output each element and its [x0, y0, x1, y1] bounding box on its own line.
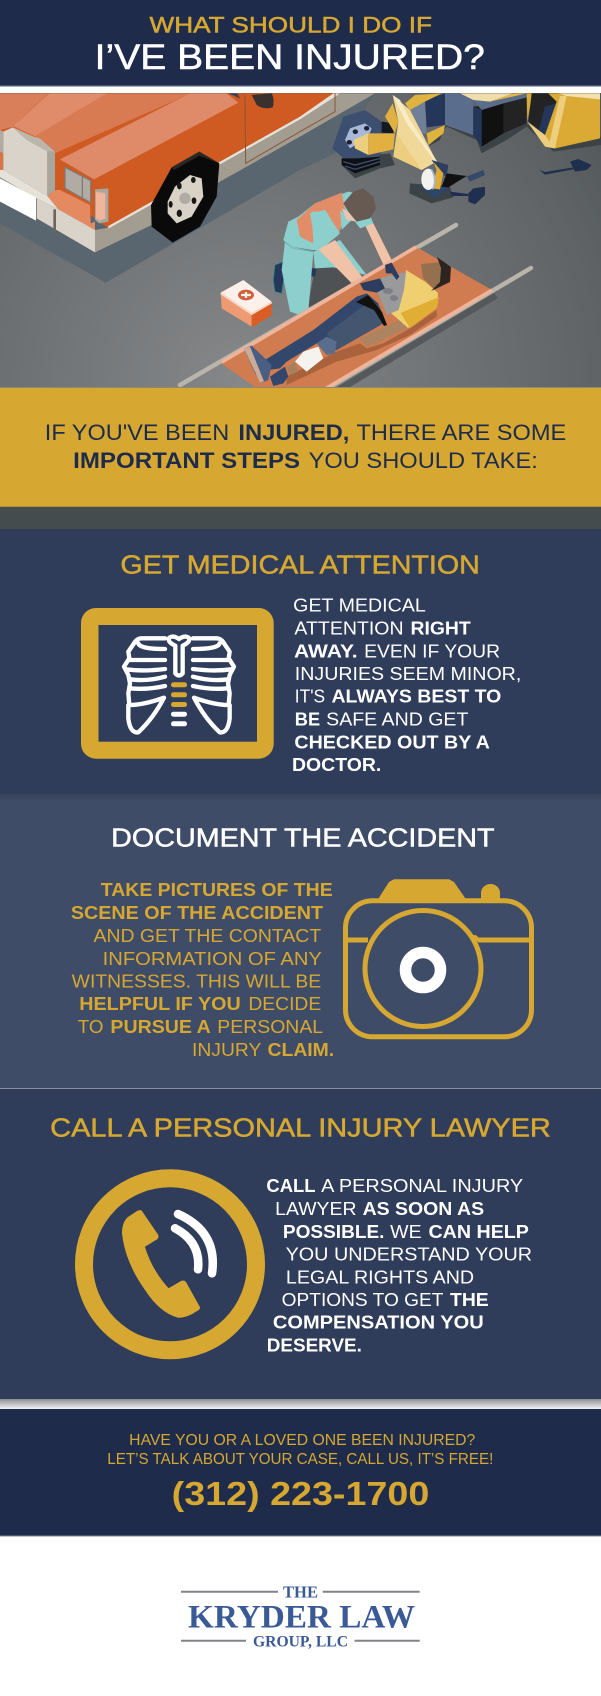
panel: call a personal injury lawyer	[0, 1089, 601, 1399]
heading: document the accident: DOCUMENT THE ACCIDENT	[111, 823, 495, 853]
panel: document the accident	[0, 793, 601, 1089]
motorcycle on its side	[332, 93, 601, 204]
text: document the accident	[71, 879, 334, 1060]
text: document the accident: CLAIM.	[268, 1039, 334, 1060]
text: medical attention	[292, 595, 521, 775]
text: medical attention: EVEN IF YOUR	[364, 640, 500, 661]
text: document the accident: TAKE PICTURES OF THE	[101, 879, 333, 900]
footer text line 2: LET’S TALK ABOUT YOUR CASE, CALL US, IT’S FREE!	[107, 1451, 493, 1468]
title line 1: WHAT SHOULD I DO IF	[150, 13, 432, 38]
text: call a lawyer: COMPENSATION YOU	[273, 1312, 484, 1333]
intro text	[45, 420, 566, 473]
text: call a lawyer: AS SOON AS	[363, 1198, 484, 1219]
text: call a lawyer: THE	[450, 1289, 489, 1310]
text: document the accident: INFORMATION OF ANY	[103, 948, 322, 969]
text: document the accident: WITNESSES. THIS WILL BE	[72, 970, 321, 991]
text: medical attention: BE	[295, 709, 320, 730]
text: medical attention: SAFE AND GET	[326, 709, 468, 730]
text: document the accident: HELPFUL IF YOU	[79, 993, 241, 1014]
text: call a lawyer: OPTIONS TO GET	[282, 1289, 443, 1310]
text: document the accident: DECIDE	[248, 993, 321, 1014]
heading: get medical attention: GET MEDICAL ATTENTION	[120, 552, 480, 580]
text: medical attention: CHECKED OUT BY A	[294, 731, 490, 752]
first aid kit	[221, 280, 272, 327]
title line 2: I’VE BEEN INJURED?	[95, 38, 485, 77]
text: call a lawyer: LAWYER	[275, 1198, 356, 1219]
logo group: GROUP, LLC	[253, 1634, 348, 1651]
text: document the accident: TO	[78, 1016, 104, 1037]
text: call a lawyer: WE	[390, 1221, 422, 1242]
phone number: (312) 223-1700	[172, 1475, 429, 1512]
medic kneeling	[273, 188, 393, 315]
text: medical attention: ALWAYS BEST TO	[332, 686, 501, 707]
text: medical attention: IT'S	[295, 686, 325, 707]
logo name: KRYDER LAW	[188, 1599, 415, 1635]
intro text: YOU SHOULD TAKE:	[309, 448, 538, 473]
icon: camera	[346, 879, 532, 1037]
text: medical attention: RIGHT	[410, 618, 471, 639]
text: call a lawyer: CALL	[266, 1175, 316, 1196]
text: document the accident: INJURY	[192, 1039, 261, 1060]
dark gap strip	[0, 507, 601, 529]
text: document the accident: AND GET THE CONTACT	[94, 925, 321, 946]
intro text: INJURED,	[238, 420, 349, 445]
text: medical attention: INJURIES SEEM MINOR,	[295, 663, 521, 684]
text: document the accident: SCENE OF THE ACCIDENT	[71, 902, 324, 923]
text: document the accident: PURSUE A	[110, 1016, 211, 1037]
header banner	[0, 0, 601, 86]
panel: get medical attention	[0, 529, 601, 793]
footer text: HAVE YOU OR A LOVED ONE BEEN INJURED?	[129, 1432, 476, 1449]
truck with shadow	[0, 93, 375, 283]
footer call to action	[0, 1409, 601, 1536]
medic gloves	[360, 263, 399, 293]
text: medical attention: GET MEDICAL	[293, 595, 426, 616]
text: medical attention: DOCTOR.	[292, 754, 381, 775]
text: call a lawyer	[266, 1175, 532, 1356]
stretcher	[180, 225, 531, 390]
text: call a lawyer: LEGAL RIGHTS AND	[286, 1267, 474, 1288]
injured person on stretcher	[244, 293, 437, 386]
icon: phone	[84, 1178, 256, 1350]
icon: x-ray	[81, 608, 274, 759]
intro text: THERE ARE SOME	[356, 420, 566, 445]
text: call a lawyer: YOU UNDERSTAND YOUR	[286, 1244, 532, 1265]
text: call a lawyer: POSSIBLE.	[283, 1221, 384, 1242]
intro text: IF YOU'VE BEEN	[45, 420, 229, 445]
text: document the accident: PERSONAL	[217, 1016, 323, 1037]
text: call a lawyer: CAN HELP	[428, 1221, 529, 1242]
text: medical attention: ATTENTION	[294, 618, 404, 639]
text: call a lawyer: DESERVE.	[267, 1335, 362, 1356]
heading: call a personal injury lawyer: CALL A PERSONAL INJURY LAWYER	[50, 1115, 551, 1143]
logo: Kryder Law Group	[181, 1583, 420, 1651]
logo the: THE	[283, 1583, 318, 1602]
shadow strip	[0, 1399, 601, 1409]
text: call a lawyer: A PERSONAL INJURY	[321, 1175, 523, 1196]
text: medical attention: AWAY.	[294, 640, 358, 661]
intro text: IMPORTANT STEPS	[73, 448, 300, 473]
illustration: accident scene	[0, 93, 601, 390]
intro gold band	[0, 387, 601, 508]
